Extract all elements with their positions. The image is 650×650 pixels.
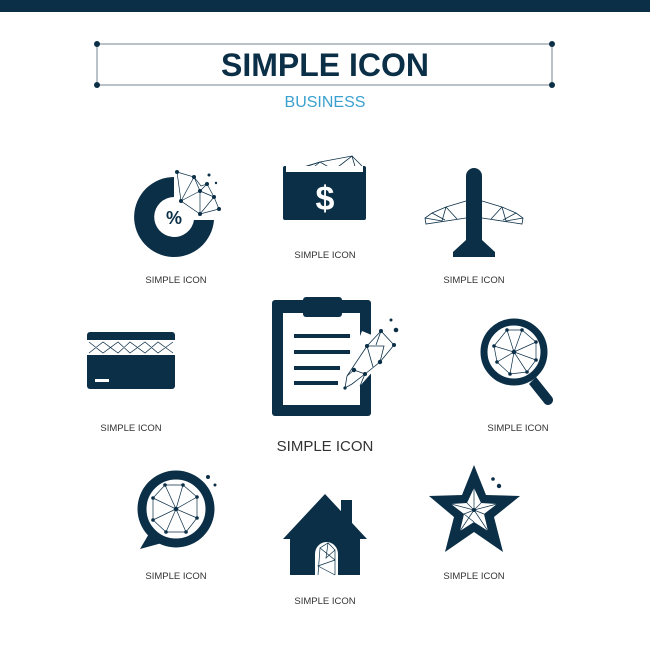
label: SIMPLE ICON (443, 571, 505, 582)
icon: clipboard (272, 297, 398, 416)
label: SIMPLE ICON (145, 275, 207, 286)
icon: star (429, 465, 520, 552)
icon: donut percent (134, 170, 221, 257)
label: SIMPLE ICON (487, 423, 549, 434)
icon: plane (425, 168, 523, 257)
icon: wallet (283, 156, 366, 220)
icon: donut percent: % (166, 208, 182, 228)
subtitle: BUSINESS (285, 94, 365, 111)
icon: magnifier (484, 322, 553, 405)
icon: wallet: $ (316, 180, 335, 218)
icon: house (283, 494, 367, 575)
icon: credit card (87, 332, 175, 389)
label: SIMPLE ICON (294, 596, 356, 607)
title box (94, 41, 555, 88)
label: SIMPLE ICON (100, 423, 162, 434)
label: SIMPLE ICON (443, 275, 505, 286)
label: SIMPLE ICON (294, 250, 356, 261)
title box: SIMPLE ICON (221, 47, 429, 83)
label: SIMPLE ICON (277, 438, 373, 455)
top bar (0, 0, 650, 12)
icon: speech bubble (140, 475, 216, 549)
label: SIMPLE ICON (145, 571, 207, 582)
